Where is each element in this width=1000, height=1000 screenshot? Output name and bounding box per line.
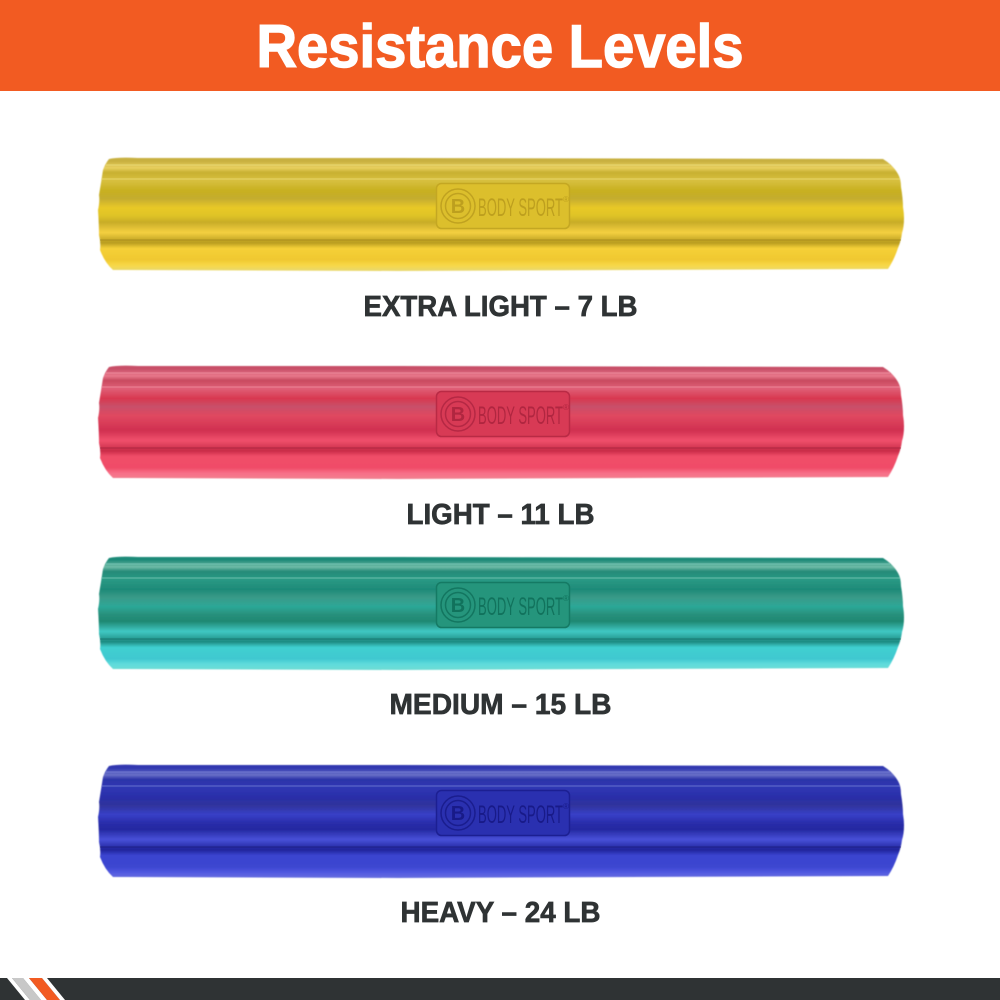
- title: Resistance Levels: [256, 13, 744, 80]
- logo emboss: green: [436, 582, 570, 628]
- logo emboss: blue: BODY SPORT: [478, 801, 563, 829]
- logo emboss: blue: ®: [563, 802, 569, 811]
- logo emboss: red: BODY SPORT: [478, 402, 563, 430]
- logo emboss: yellow: [436, 184, 570, 228]
- label: light: LIGHT – 11 LB: [406, 499, 594, 531]
- footer bar with stripes: [0, 978, 1000, 1000]
- logo emboss: green: BODY SPORT: [478, 593, 563, 621]
- logo emboss: blue: [436, 790, 570, 836]
- panel: heavy bar: [98, 765, 904, 878]
- logo emboss: yellow: BODY SPORT: [478, 194, 563, 222]
- label: heavy: HEAVY – 24 LB: [400, 897, 600, 929]
- label: medium: MEDIUM – 15 LB: [390, 689, 612, 721]
- logo emboss: green: ®: [563, 594, 569, 603]
- panel: light bar: [98, 366, 904, 479]
- logo emboss: red: ®: [563, 403, 569, 412]
- logo emboss: red: [436, 392, 570, 436]
- panel: medium bar: [98, 557, 904, 670]
- logo emboss: red: B: [451, 404, 465, 426]
- logo emboss: blue: B: [451, 803, 465, 825]
- logo emboss: yellow: B: [451, 196, 465, 218]
- logo emboss: yellow: ®: [563, 195, 569, 204]
- panel: extra light bar: [98, 158, 904, 271]
- header banner: [0, 0, 1000, 91]
- logo emboss: green: B: [451, 595, 465, 617]
- label: extra light: EXTRA LIGHT – 7 LB: [364, 291, 638, 323]
